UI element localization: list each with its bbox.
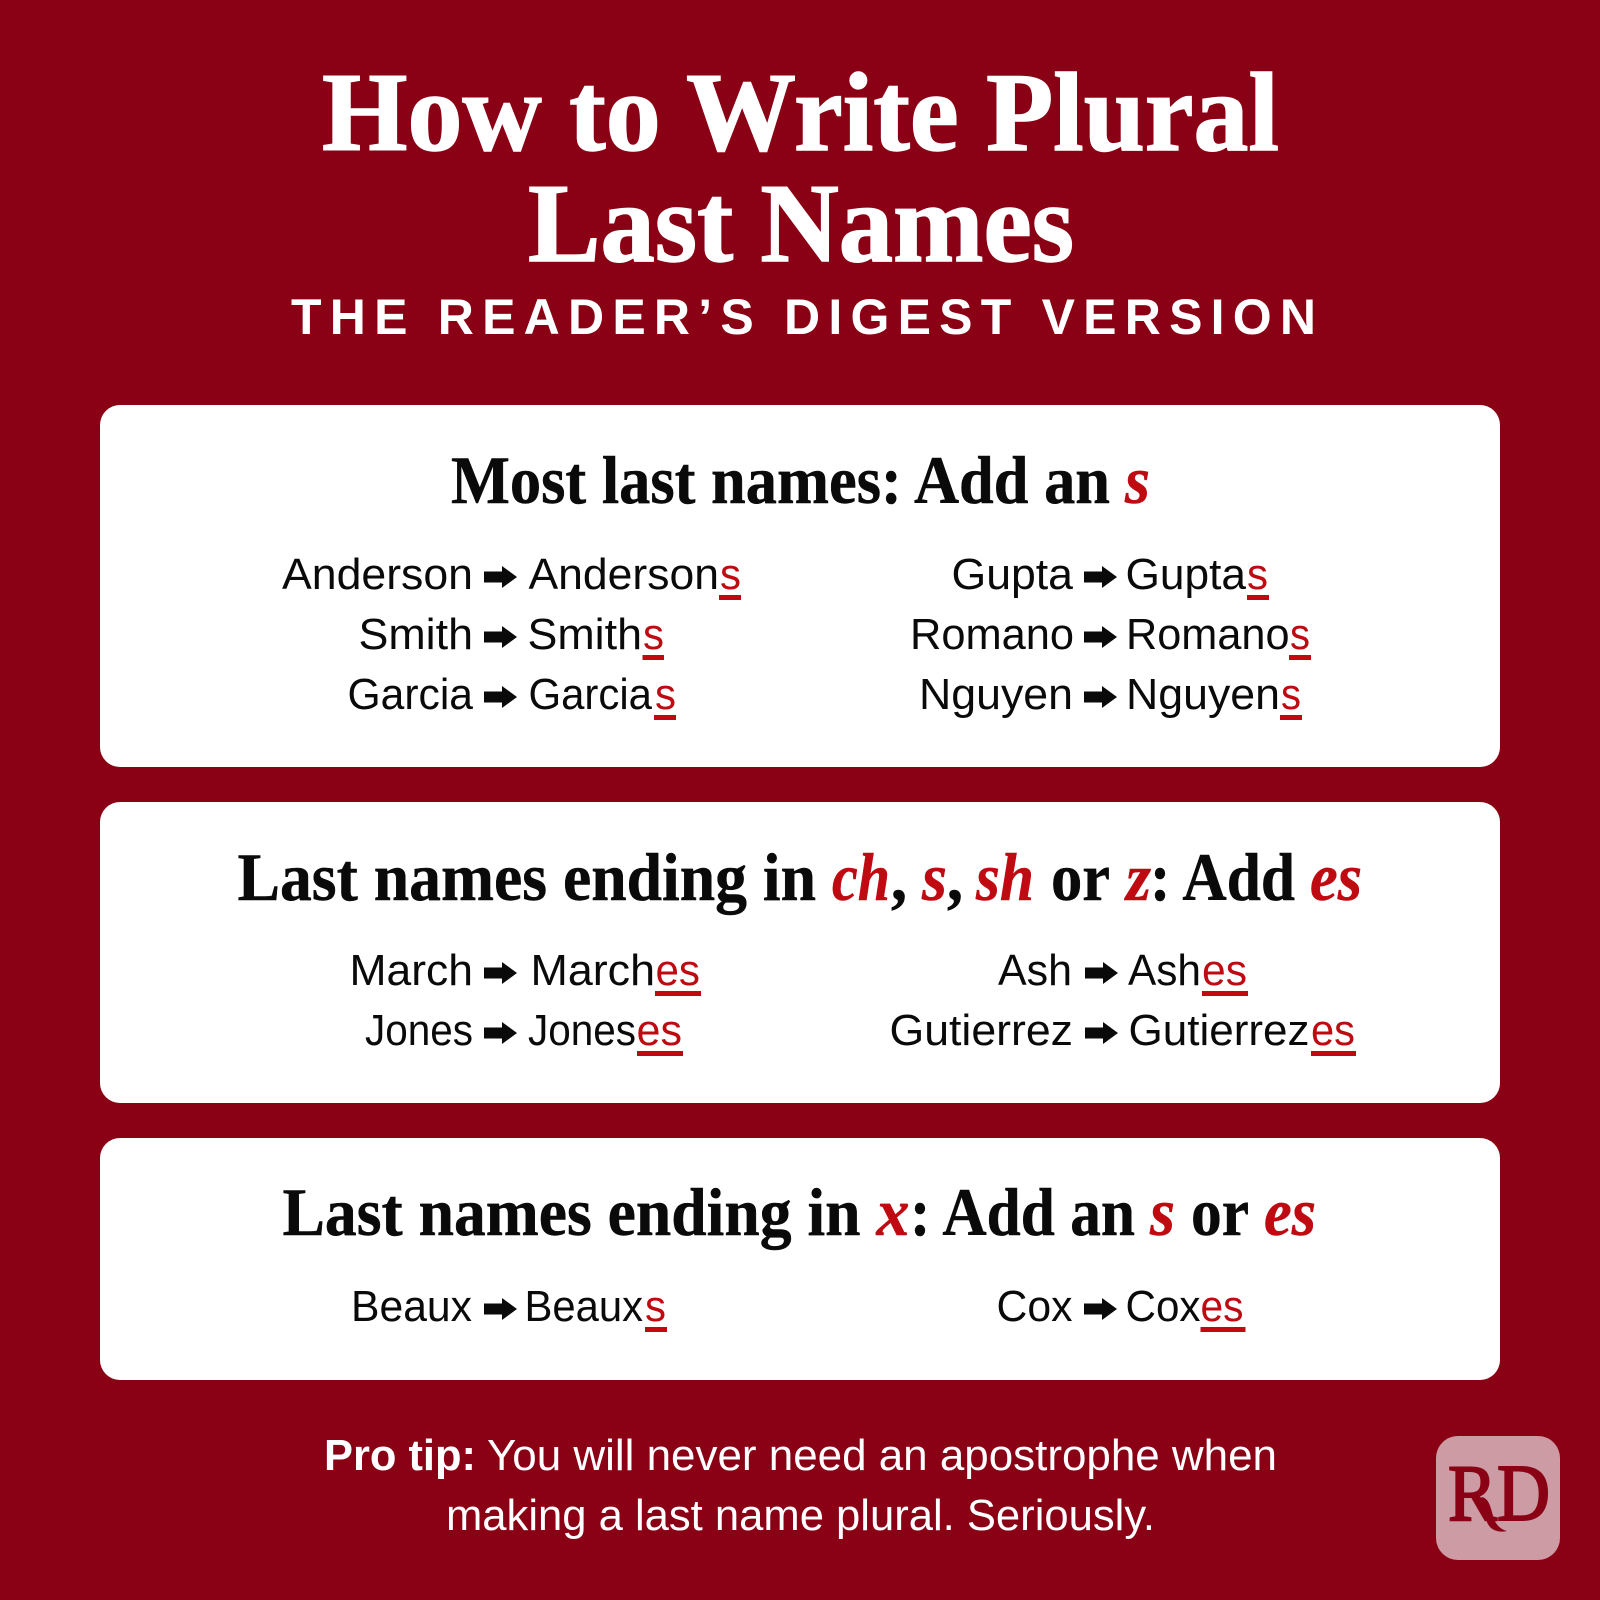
example: Jones: es: [636, 1006, 682, 1055]
example: Cox: Cox: [996, 1282, 1072, 1331]
example: Jones: [365, 1006, 683, 1056]
example: Romano: [910, 610, 1311, 660]
heading: ch, s, sh or z: ,: [891, 839, 907, 915]
title: How to Write Plural: [322, 51, 1279, 175]
example: Cox: es: [1200, 1282, 1244, 1331]
example: Nguyen: Nguyen: [919, 670, 1073, 719]
example: Smith: Smith: [528, 610, 642, 659]
example: Gutierrez: [890, 1006, 1356, 1056]
example: Garcia: Garcia: [348, 670, 474, 719]
example: Anderson: Anderson: [528, 550, 719, 599]
example: Cox: [996, 1282, 1246, 1332]
example: Beaux: Beaux: [351, 1282, 472, 1331]
subtitle: THE READER’S DIGEST VERSION: [291, 289, 1316, 345]
example: Beaux: s: [645, 1282, 666, 1331]
pro tip: You will never need an apostrophe when: [487, 1431, 1277, 1480]
heading: ch, s, sh or z: sh: [975, 839, 1034, 915]
example: Ash: es: [1202, 946, 1247, 995]
heading: ch, s, sh or z: ,: [947, 839, 963, 915]
example: Gupta: [952, 550, 1269, 600]
title: [322, 51, 1279, 286]
example: Garcia: [348, 670, 676, 720]
example: Garcia: s: [655, 670, 676, 719]
panel: ch, s, sh or z: [100, 802, 1500, 1103]
example: Gupta: s: [1247, 550, 1268, 599]
example: Gutierrez: Gutierrez: [890, 1006, 1073, 1055]
example: March: [350, 946, 701, 996]
example: Jones: Jones: [365, 1006, 473, 1055]
title: Last Names: [528, 162, 1074, 286]
example: Romano: Romano: [910, 610, 1074, 659]
heading: x: s: [1149, 1174, 1175, 1250]
heading: x: Last names ending in: [282, 1174, 860, 1250]
panel: most last names: [100, 405, 1500, 767]
example: Romano: Romano: [1126, 610, 1290, 659]
example: March: March: [530, 946, 655, 995]
example: Ash: Ash: [1128, 946, 1201, 995]
example: Gutierrez: es: [1311, 1006, 1355, 1055]
example: Anderson: [282, 550, 741, 600]
heading: ch, s, sh or z: s: [921, 839, 947, 915]
pro tip: Pro tip:: [324, 1431, 476, 1480]
heading: ch, s, sh or z: Last names ending in: [238, 839, 816, 915]
pro tip: making a last name plural. Seriously.: [446, 1491, 1155, 1540]
example: Beaux: [351, 1282, 667, 1332]
heading: x: : Add an: [910, 1174, 1135, 1250]
icon: RD logo: RD: [1448, 1450, 1550, 1538]
example: Nguyen: s: [1281, 670, 1301, 719]
heading: most last names: Most last names: Add an: [451, 442, 1110, 518]
example: March: March: [350, 946, 473, 995]
heading: x: x: [876, 1174, 910, 1250]
heading: ch, s, sh or z: : Add: [1150, 839, 1295, 915]
heading: most last names: s: [1124, 442, 1150, 518]
example: Nguyen: [919, 670, 1302, 720]
example: Beaux: Beaux: [524, 1282, 643, 1331]
pro tip: [324, 1431, 1277, 1540]
example: Ash: Ash: [998, 946, 1072, 995]
example: Jones: Jones: [528, 1006, 636, 1055]
example: March: es: [656, 946, 700, 995]
heading: ch, s, sh or z: or: [1051, 839, 1110, 915]
example: Smith: [358, 610, 664, 660]
heading: ch, s, sh or z: [238, 839, 1362, 915]
heading: x: or: [1191, 1174, 1249, 1250]
example: Gupta: Gupta: [1126, 550, 1247, 599]
heading: ch, s, sh or z: ch: [832, 839, 890, 915]
heading: x: es: [1264, 1174, 1316, 1250]
example: Garcia: Garcia: [528, 670, 653, 719]
example: Nguyen: Nguyen: [1126, 670, 1280, 719]
heading: x: [282, 1174, 1316, 1250]
example: Anderson: s: [720, 550, 741, 599]
heading: ch, s, sh or z: z: [1124, 839, 1152, 915]
example: Gutierrez: Gutierrez: [1128, 1006, 1310, 1055]
example: Gupta: Gupta: [952, 550, 1074, 599]
icon: RD logo: [1436, 1436, 1560, 1560]
example: Romano: s: [1290, 610, 1310, 659]
example: Anderson: Anderson: [282, 550, 473, 599]
panel: x: [100, 1138, 1500, 1380]
example: Cox: Cox: [1126, 1282, 1200, 1331]
example: Smith: Smith: [358, 610, 473, 659]
example: Smith: s: [643, 610, 664, 659]
example: Ash: [998, 946, 1248, 996]
heading: ch, s, sh or z: es: [1310, 839, 1362, 915]
